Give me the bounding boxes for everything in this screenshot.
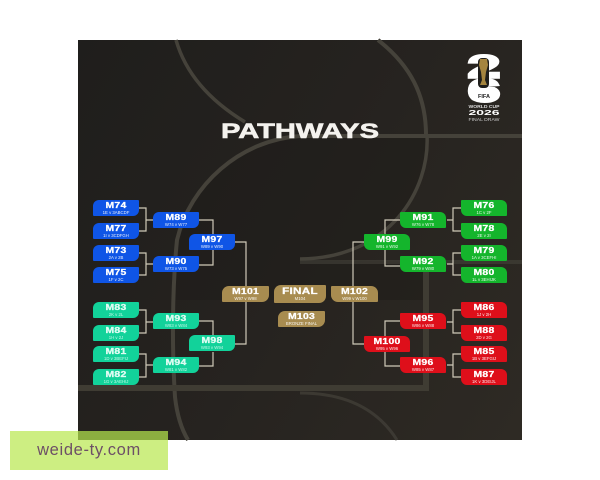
match M79: 1A v 3CEFHI: [472, 254, 496, 260]
match M88: M88: [473, 326, 495, 334]
match M92: M92: [412, 256, 434, 266]
match M95: M95: [412, 314, 434, 322]
match M93: [153, 313, 199, 329]
match M90: W73 v W75: [165, 266, 187, 270]
match M81: [93, 346, 139, 362]
final: FINAL: [282, 286, 318, 296]
match M87: 1K v 3DEIJL: [472, 378, 496, 384]
match M81: M81: [105, 346, 127, 356]
match M85: 1B v 3EFGIJ: [472, 356, 496, 360]
match M101: [222, 286, 269, 302]
match M95: W86 v W88: [412, 322, 434, 328]
match M73: M73: [105, 246, 127, 254]
match M99: M99: [376, 234, 398, 244]
match M84: 1H v 2J: [109, 334, 123, 340]
match M98: W93 v W94: [201, 344, 223, 350]
match M73: [93, 245, 139, 261]
logo: FIFA World Cup 2026 final draw: FINAL DRAW: [468, 117, 500, 122]
match M77: M77: [105, 224, 127, 232]
match M99: [364, 234, 410, 250]
match M90: M90: [165, 256, 187, 266]
match M100: [364, 336, 410, 352]
match M87: M87: [473, 370, 495, 378]
match M103 bronze final: BRONZE FINAL: [286, 320, 317, 326]
match M82: M82: [105, 370, 127, 378]
match M87: [461, 369, 507, 385]
match M74: 1E v 3ABCDF: [103, 210, 129, 214]
logo: FIFA World Cup 2026 final draw: FIFA: [478, 94, 490, 100]
match M92: W79 v W80: [412, 266, 434, 270]
title: PATHWAYS: [221, 120, 379, 143]
logo: FIFA World Cup 2026 final draw: WORLD CUP: [468, 104, 500, 109]
logo: FIFA World Cup 2026 final draw: 6: [469, 74, 499, 108]
match M79: M79: [473, 246, 495, 254]
match M103 bronze final: [278, 311, 325, 327]
match M76: M76: [473, 200, 495, 210]
match M96: [400, 357, 446, 373]
match M98: [189, 335, 235, 351]
match M97: [189, 234, 235, 250]
logo: FIFA World Cup 2026 final draw: 2: [469, 50, 499, 84]
match M73: 2A v 2B: [109, 254, 123, 260]
match M101: W97 v W98: [234, 296, 257, 300]
match M83: M83: [105, 302, 127, 312]
match M77: [93, 223, 139, 239]
match M80: M80: [473, 268, 495, 276]
match M97: M97: [201, 234, 223, 244]
match M96: W85 v W87: [412, 366, 434, 372]
match M77: 1I v 3CDFGH: [103, 232, 129, 238]
match M91: [400, 212, 446, 228]
match M92: [400, 256, 446, 272]
match M83: [93, 302, 139, 318]
match M96: M96: [412, 358, 434, 366]
match M94: M94: [165, 358, 187, 366]
match M79: [461, 245, 507, 261]
match M90: [153, 256, 199, 272]
match M93: M93: [165, 314, 187, 322]
match M88: 2D v 2G: [476, 334, 492, 340]
match M82: [93, 369, 139, 385]
match M75: 1F v 2C: [108, 276, 124, 282]
match M88: [461, 325, 507, 341]
match M97: W89 v W90: [201, 244, 223, 248]
match M84: M84: [105, 326, 127, 334]
match M78: M78: [473, 224, 495, 232]
match M86: M86: [473, 302, 495, 312]
match M76: 1C v 2F: [476, 210, 492, 214]
match M89: M89: [165, 212, 187, 222]
match M78: 2E v 2I: [477, 232, 491, 238]
match M102: M102: [341, 286, 368, 296]
match M93: W83 v W84: [165, 322, 187, 328]
match M100: W95 v W96: [376, 346, 398, 350]
match M94: [153, 357, 199, 373]
match M82: 1G v 3AEHIJ: [104, 378, 128, 384]
watermark background: [10, 431, 168, 470]
match M75: [93, 267, 139, 283]
match M74: [93, 200, 139, 216]
match M101: M101: [232, 286, 259, 296]
match M98: M98: [201, 336, 223, 344]
match M80: [461, 267, 507, 283]
match M102: W99 v W100: [342, 296, 367, 300]
match M80: 1L v 3EHIJK: [472, 276, 496, 282]
match M76: [461, 200, 507, 216]
match M85: M85: [473, 346, 495, 356]
match M86: [461, 302, 507, 318]
logo: FIFA World Cup 2026 final draw: 2026: [468, 108, 500, 117]
match M86: 1J v 2H: [477, 312, 491, 316]
match M78: [461, 223, 507, 239]
match M102: [331, 286, 378, 302]
match M91: W76 v W78: [412, 222, 434, 226]
match M85: [461, 346, 507, 362]
final: M104: [295, 296, 305, 300]
match M89: W74 v W77: [165, 222, 187, 226]
watermark overlap band: [78, 431, 168, 440]
match M75: M75: [105, 268, 127, 276]
match M91: M91: [412, 212, 434, 222]
match M83: 2K v 2L: [109, 312, 123, 316]
match M84: [93, 325, 139, 341]
final: [274, 285, 326, 303]
match M100: M100: [373, 336, 401, 346]
match M89: [153, 212, 199, 228]
match M94: W81 v W82: [165, 366, 187, 372]
match M81: 1D v 3BEFIJ: [104, 356, 128, 360]
match M74: M74: [105, 200, 127, 210]
watermark text: weide-ty.com: [37, 441, 141, 459]
match M103 bronze final: M103: [288, 312, 315, 320]
panel: dark background: [78, 40, 522, 440]
match M95: [400, 313, 446, 329]
match M99: W91 v W92: [376, 244, 398, 248]
